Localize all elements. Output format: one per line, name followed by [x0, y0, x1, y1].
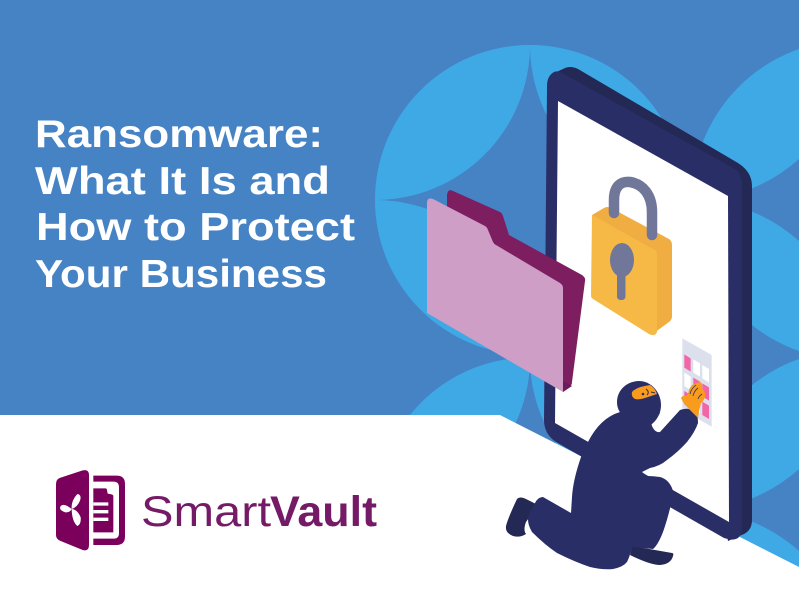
- padlock: [591, 182, 672, 335]
- ninja head: [617, 381, 661, 424]
- ninja eyes: [642, 389, 655, 395]
- title: What It Is and: [35, 160, 330, 203]
- title: Ransomware:: [35, 113, 323, 156]
- keypad: [682, 338, 712, 427]
- folder: [427, 190, 585, 392]
- logo wordmark: Vault: [270, 488, 377, 536]
- title: [35, 113, 355, 296]
- ninja hand: [681, 382, 705, 418]
- title: How to Protect: [36, 206, 355, 249]
- ninja body: [528, 405, 698, 569]
- logo wordmark: Smart: [141, 488, 271, 536]
- tablet screen: [555, 101, 729, 522]
- tablet: [544, 67, 752, 541]
- ninja mask opening: [632, 385, 657, 399]
- white lower panel: [0, 415, 799, 612]
- ninja feet: [506, 498, 673, 565]
- logo door icon: [56, 470, 125, 550]
- ninja figure: [506, 381, 705, 569]
- title: Your Business: [35, 253, 327, 296]
- logo: [56, 470, 377, 550]
